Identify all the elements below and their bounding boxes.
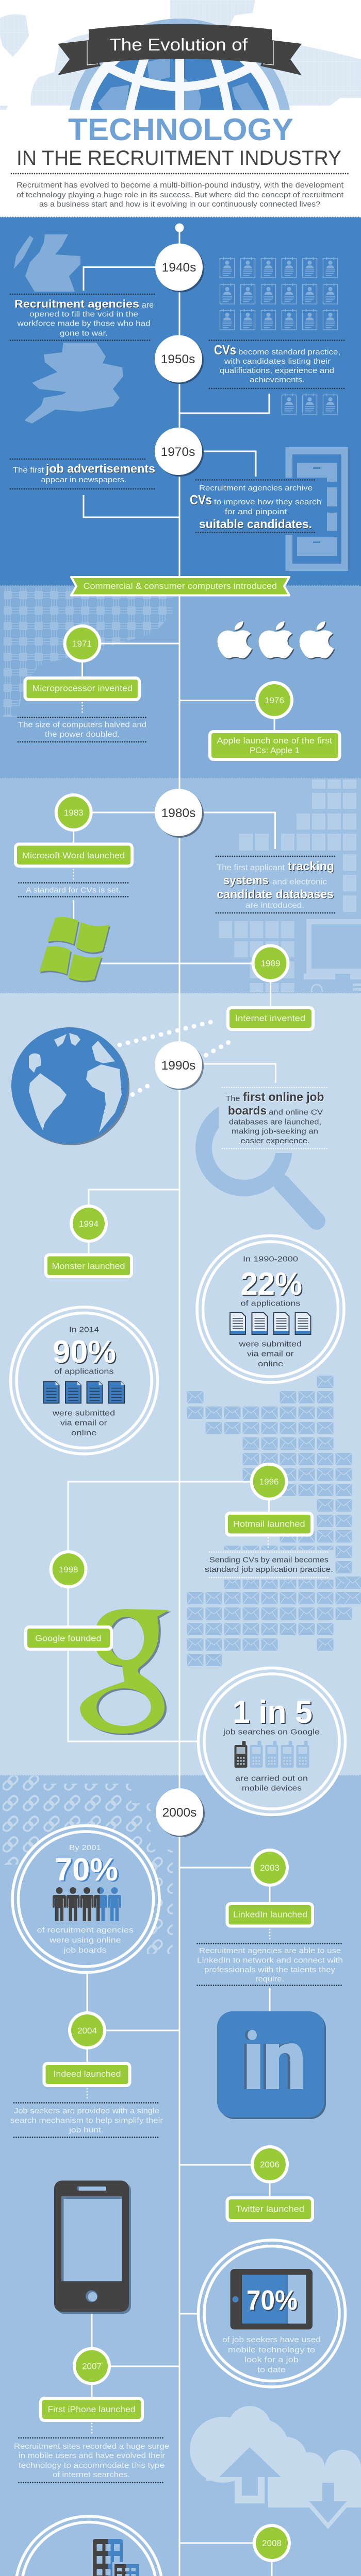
milestone: 2003 LinkedIn: Recruitment agencies are able to use xyxy=(199,1946,341,1955)
milestone: 2007 iPhone: 2007 xyxy=(82,2362,102,2371)
milestone: 2008 Dropbox: 2008 xyxy=(262,2538,282,2548)
decade marker: 1950s xyxy=(155,335,204,384)
milestone: 2007 iPhone xyxy=(14,2347,169,2482)
icons: five mobile phones xyxy=(234,1741,309,1768)
text block: archive CVs: CVs xyxy=(190,492,212,507)
milestone: 2003 LinkedIn: 2003 xyxy=(260,1863,280,1873)
decade marker: 1940s: 1940s xyxy=(162,261,196,275)
stat: 70% of agencies using job boards xyxy=(12,1826,159,1972)
milestone: 1983 Microsoft Word: Microsoft Word launched xyxy=(22,851,125,860)
globe xyxy=(70,19,290,110)
milestone: 1994 Monster xyxy=(46,1205,132,1277)
world map pattern xyxy=(0,0,361,110)
icon: LinkedIn logo xyxy=(217,2011,326,2119)
milestone: 2008 Dropbox xyxy=(200,2524,344,2576)
stat: 1 in 5 job searches xyxy=(198,1668,346,1815)
panel: email envelope pattern xyxy=(187,1376,361,1666)
text block: applicant tracking systems: systems xyxy=(223,874,269,887)
milestone: 1989 internet: 1989 xyxy=(261,959,280,969)
milestone: 1971 microprocessor: The size of computers halved and xyxy=(18,720,146,730)
decade marker: 2000s: 2000s xyxy=(162,1806,196,1820)
milestone: 1996 Hotmail: Sending CVs by email becomes xyxy=(209,1556,329,1564)
stat: 70% of agencies using job boards: job boards xyxy=(63,1946,106,1955)
stat: 90% of applications xyxy=(10,1307,158,1454)
text block: applicant tracking systems: and electronic xyxy=(272,878,327,886)
stat: 22% of applications: In 1990-2000 xyxy=(243,1255,298,1263)
text block: applicant tracking systems: tracking xyxy=(288,859,334,873)
text block: applicant tracking systems: candidate databases xyxy=(217,887,334,901)
stat: 70% of agencies using job boards: of recruitment agencies xyxy=(37,1926,134,1935)
text block: first online job boards: and online CV xyxy=(269,1108,323,1117)
stat: 22% of applications xyxy=(197,1235,344,1383)
milestone: 1998 Google xyxy=(26,1550,111,1649)
text block: first job advertisements: job advertisements xyxy=(45,462,155,475)
text block: recruitment agencies: workforce made by those who had xyxy=(17,319,151,328)
stat: 22% of applications: of applications xyxy=(240,1299,300,1308)
milestone: 2007 iPhone: Recruitment sites recorded a huge surge xyxy=(14,2442,169,2451)
text block: first online job boards: The xyxy=(226,1094,240,1103)
stat: 70% of job seekers mobile: 70% xyxy=(247,2285,298,2316)
decade marker: 1980s: 1980s xyxy=(161,806,195,820)
decade marker: 1940s xyxy=(155,243,204,293)
milestone: 1983 Microsoft Word: 1983 xyxy=(64,808,84,818)
milestone: 2004 Indeed xyxy=(10,2011,163,2137)
milestone: 1998 Google: 1998 xyxy=(59,1565,78,1574)
stat: 70% of job seekers mobile: of job seekers have used xyxy=(222,2335,321,2344)
text block: CVs become standard: achievements. xyxy=(250,376,305,384)
text block: CVs become standard: CVs xyxy=(214,342,236,358)
intro paragraph: as a business start and how is it evolving in our continuously connected lives? xyxy=(39,200,320,209)
text block: recruitment agencies: are xyxy=(142,301,154,310)
stat: 70% of job seekers mobile: to date xyxy=(257,2366,286,2374)
stat: 50% of companies cloud xyxy=(15,2516,162,2576)
text block: first job advertisements: appear in newspapers. xyxy=(41,476,127,484)
stat: 1 in 5 job searches: mobile devices xyxy=(242,1784,302,1793)
title line 1: The Evolution of xyxy=(109,35,248,54)
text block: archive CVs: for and pinpoint xyxy=(225,507,287,516)
milestone: 2003 LinkedIn xyxy=(197,1849,343,1986)
filing cabinet xyxy=(196,447,348,571)
decade marker: 1970s: 1970s xyxy=(161,445,195,459)
ribbon: commercial and consumer computers xyxy=(71,577,289,596)
text block: first online job boards xyxy=(222,1088,329,1149)
milestone: 2007 iPhone: in mobile users and have evolved their xyxy=(19,2451,165,2460)
text block: archive CVs: Recruitment agencies archive xyxy=(199,484,313,493)
intro paragraph xyxy=(11,174,350,209)
milestone: 2004 Indeed: search mechanism to help simplify their xyxy=(10,2116,163,2125)
header: world map and globe xyxy=(0,0,361,110)
milestone: 1996 Hotmail: standard job application practice. xyxy=(205,1565,333,1574)
stat: 90% of applications: via email or xyxy=(60,1419,107,1427)
stat: 90% of applications: were submitted xyxy=(52,1409,115,1418)
decade marker: 1990s xyxy=(155,1041,204,1090)
title: in the recruitment industry: IN THE RECRUITMENT INDUSTRY xyxy=(17,147,341,170)
stat: 22% of applications: 22% xyxy=(240,1266,302,1302)
icon: Windows logo xyxy=(39,917,110,982)
stat: 90% of applications: of applications xyxy=(54,1367,113,1376)
text block: archive CVs: to improve how they search xyxy=(214,498,321,506)
stat: 70% of job seekers mobile xyxy=(198,2240,346,2387)
milestone: 1976 Apple: Apple launch one of the first xyxy=(217,736,332,745)
text block: first online job boards: databases are launched, xyxy=(229,1118,321,1126)
map of England xyxy=(24,343,123,423)
text block: recruitment agencies: opened to fill the void in the xyxy=(29,310,138,318)
milestone: 1983 Microsoft Word xyxy=(15,793,132,896)
stat: 90% of applications: In 2014 xyxy=(69,1325,99,1334)
decade marker: 2000s xyxy=(156,1788,205,1837)
milestone: 2007 iPhone: of internet searches. xyxy=(53,2470,130,2479)
text block: first online job boards: easier experience. xyxy=(240,1137,309,1145)
panel: 1990s magnifying glass xyxy=(204,1085,330,1221)
milestone: 1994 Monster: Monster launched xyxy=(52,1261,125,1271)
milestone: 1996 Hotmail xyxy=(205,1463,333,1578)
text block: applicant tracking systems: The first applicant xyxy=(217,863,285,872)
CV icon grid xyxy=(220,257,337,414)
stat: 70% of agencies using job boards: were using online xyxy=(49,1936,121,1944)
text block: recruitment agencies: gone to war. xyxy=(60,329,108,338)
milestone: 1971 microprocessor: 1971 xyxy=(72,639,92,649)
panel: computers chip pattern xyxy=(3,587,173,717)
milestone: 1976 Apple: 1976 xyxy=(265,696,284,705)
milestone: 1971 microprocessor: Microprocessor invented xyxy=(32,683,133,693)
milestone: 1996 Hotmail: Hotmail launched xyxy=(233,1519,305,1529)
icon: computer monitor and keyboard xyxy=(304,919,361,992)
milestone: 2003 LinkedIn: LinkedIn to network and connect with xyxy=(197,1956,343,1965)
milestone: 2006 Twitter: Twitter launched xyxy=(236,2204,304,2214)
stat: 22% of applications: online xyxy=(258,1360,284,1368)
milestone: 2003 LinkedIn: LinkedIn launched xyxy=(233,1909,307,1920)
decade marker: 1950s: 1950s xyxy=(161,352,195,366)
text block: CVs become standard xyxy=(209,340,346,388)
title ribbon xyxy=(58,24,302,75)
intro paragraph: Recruitment has evolved to become a multi-billion-pound industry, with the development xyxy=(17,181,344,190)
text block: CVs become standard: become standard practice, xyxy=(238,348,340,357)
stat: 70% of agencies using job boards: 70% xyxy=(55,1852,118,1888)
icon: office buildings xyxy=(93,2539,141,2576)
milestone: 1983 Microsoft Word: A standard for CVs is set. xyxy=(26,886,121,894)
panel: 1940s to 1970s artwork xyxy=(14,234,348,571)
milestone: 1994 Monster: 1994 xyxy=(79,1219,99,1229)
map of Scotland xyxy=(14,234,80,292)
text block: first online job boards: first online job xyxy=(243,1090,324,1104)
stat: 22% of applications: via email or xyxy=(247,1350,294,1358)
milestone: 1976 Apple: PCs: Apple 1 xyxy=(250,745,300,755)
decade marker: 1980s xyxy=(155,789,204,838)
milestone: 1998 Google: Google founded xyxy=(35,1633,101,1643)
icon: Google g xyxy=(80,1609,171,1735)
icons: five people xyxy=(53,1887,121,1921)
milestone: 1971 microprocessor: the power doubled. xyxy=(45,730,120,739)
arrow: dotted signal lines from globe xyxy=(120,1020,235,1094)
text block: archive CVs: suitable candidates. xyxy=(199,517,312,531)
text block: CVs become standard: qualifications, experience and xyxy=(220,366,334,375)
milestone: 2004 Indeed: Indeed launched xyxy=(54,2069,121,2079)
timeline start dot xyxy=(175,224,184,232)
milestone: 2004 Indeed: Job seekers are provided with a single xyxy=(14,2107,159,2115)
icon: iPhone xyxy=(54,2180,131,2314)
text block: first job advertisements xyxy=(10,459,156,489)
text block: first online job boards: making job-seeking an xyxy=(232,1127,318,1136)
icon: cloud with upload and download arrows xyxy=(190,2406,361,2529)
text block: applicant tracking systems xyxy=(216,856,335,913)
icons: four filled documents xyxy=(43,1382,124,1403)
milestone: 2007 iPhone: technology to accommodate this type xyxy=(19,2461,165,2470)
stat: 1 in 5 job searches: job searches on Google xyxy=(223,1728,320,1736)
ribbon: commercial and consumer computers: Commercial & consumer computers introduced xyxy=(84,581,277,591)
milestone: 1989 internet xyxy=(228,944,313,1029)
panel: chain link pattern xyxy=(3,1775,173,1954)
icons: three apples xyxy=(218,621,335,659)
stat: 1 in 5 job searches: 1 in 5 xyxy=(233,1694,313,1730)
text block: recruitment agencies xyxy=(10,294,156,340)
decade marker: 1970s xyxy=(155,428,204,477)
timeline and connector lines xyxy=(68,228,276,2576)
stat: 70% of job seekers mobile: look for a job xyxy=(244,2355,299,2364)
icons: four part-filled documents xyxy=(230,1313,310,1334)
milestone: 2004 Indeed: 2004 xyxy=(77,2026,97,2036)
text block: archive CVs xyxy=(190,480,321,533)
milestone: 2006 Twitter xyxy=(227,2145,313,2221)
icon: tablet xyxy=(230,2269,313,2330)
text block: first job advertisements: The first xyxy=(13,466,44,475)
text block: CVs become standard: with candidates listing their xyxy=(224,357,331,366)
milestone: 1996 Hotmail: 1996 xyxy=(259,1477,279,1487)
milestone: 2006 Twitter: 2006 xyxy=(260,2160,280,2170)
milestone: 2007 iPhone: First iPhone launched xyxy=(47,2404,135,2414)
stat: 90% of applications: 90% xyxy=(53,1334,116,1370)
milestone: 1989 internet: Internet invented xyxy=(235,1013,305,1023)
decade marker: 1990s: 1990s xyxy=(161,1059,195,1073)
title: technology: TECHNOLOGY xyxy=(68,112,293,147)
icon: earth globe xyxy=(11,1027,129,1145)
text block: applicant tracking systems: are introduced. xyxy=(245,901,304,910)
stat: 70% of job seekers mobile: mobile technology to xyxy=(228,2346,315,2354)
intro paragraph: of technology playing a huge role in its success. But where did the concept of recruitment xyxy=(17,191,344,199)
milestone: 2003 LinkedIn: require. xyxy=(255,1975,284,1984)
milestone: 1971 microprocessor xyxy=(18,624,147,742)
stat: 90% of applications: online xyxy=(71,1429,97,1437)
milestone: 1976 Apple xyxy=(210,681,339,759)
milestone: 2003 LinkedIn: professionals with the talents they xyxy=(204,1965,336,1974)
stat: 22% of applications: were submitted xyxy=(238,1340,302,1349)
text block: first online job boards: boards xyxy=(228,1104,267,1117)
text block: recruitment agencies: Recruitment agencies xyxy=(14,298,139,310)
milestone: 2004 Indeed: job hunt. xyxy=(69,2126,104,2134)
stat: 70% of agencies using job boards: By 2001 xyxy=(69,1843,101,1852)
stat: 1 in 5 job searches: are carried out on xyxy=(235,1774,308,1783)
panel: 1980s database pattern xyxy=(219,779,356,992)
